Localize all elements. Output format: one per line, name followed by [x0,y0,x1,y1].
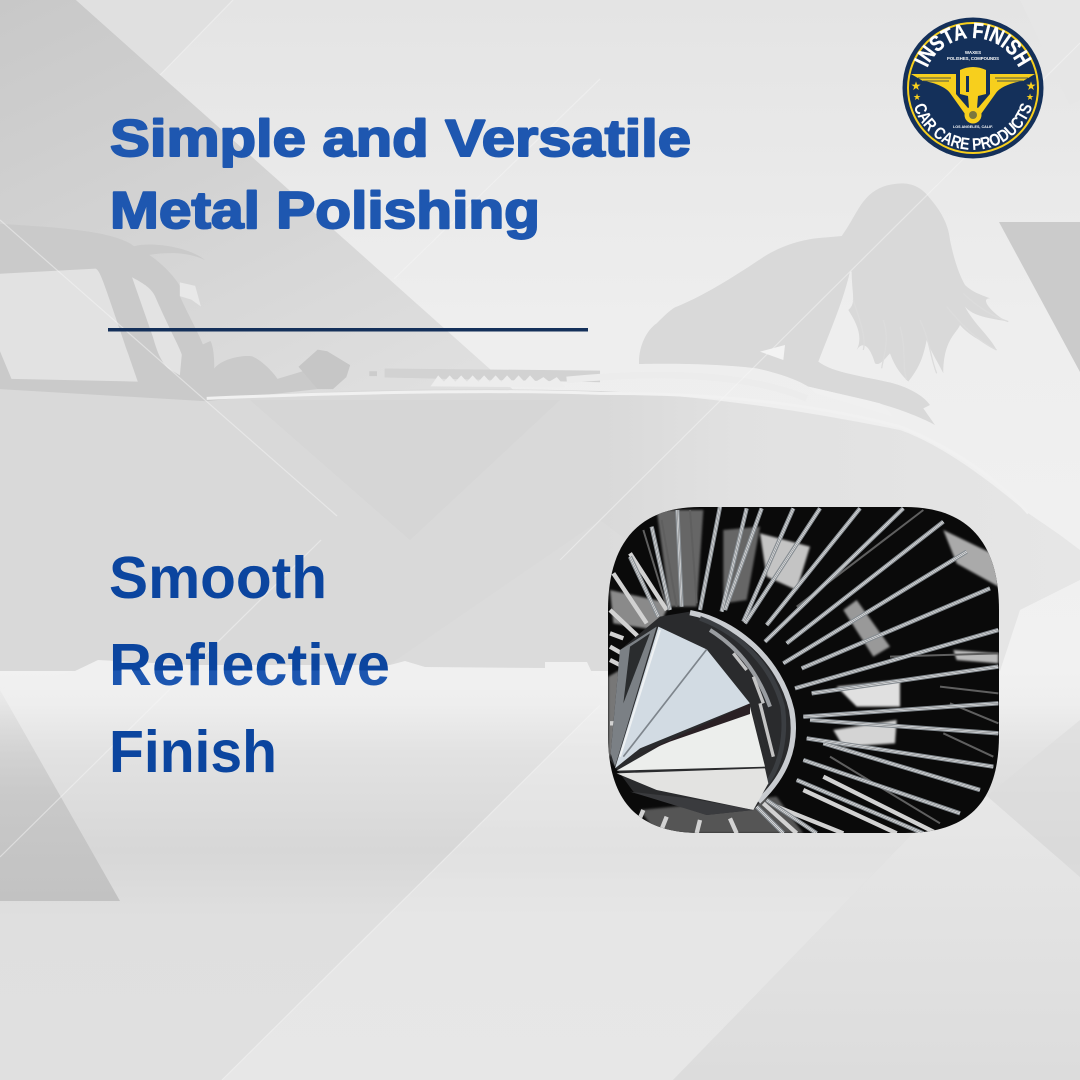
woman silhouette [639,183,1008,425]
logo wings and piston [911,67,1035,124]
title: Simple and Versatile [110,110,691,168]
car roof and windscreen [0,224,600,401]
logo stars: ★ [1026,79,1036,93]
title: Metal Polishing [110,182,540,240]
logo stars: ★ [911,79,921,93]
logo text [914,22,1032,150]
logo text: LOS ANGELES, CALIF. [953,124,993,129]
hub cap [610,612,793,815]
logo stars: ★ [913,93,921,103]
logo: Insta Finish badge [902,18,1044,158]
logo text: CAR CARE PRODUCTS [914,104,1032,150]
logo stars: ★ [1026,93,1034,103]
logo text: WAXES [965,50,981,55]
horizon floor [0,671,1080,1080]
hood highlights [207,375,1028,513]
logo text: INSTA FINISH [914,22,1032,68]
logo text: POLISHES, COMPOUNDS [947,56,999,61]
logo stars [911,79,1036,103]
subheading: Smooth Reflective Finish: Reflective [109,632,390,698]
subheading: Smooth Reflective Finish: Finish [109,719,277,785]
car body silhouette [0,224,1080,1080]
title [110,110,691,240]
subheading: Smooth Reflective Finish [109,545,390,785]
subheading: Smooth Reflective Finish: Smooth [109,545,327,611]
photo: chrome wire wheel [600,500,1010,840]
spokes [610,507,998,833]
divider rule [108,328,588,332]
